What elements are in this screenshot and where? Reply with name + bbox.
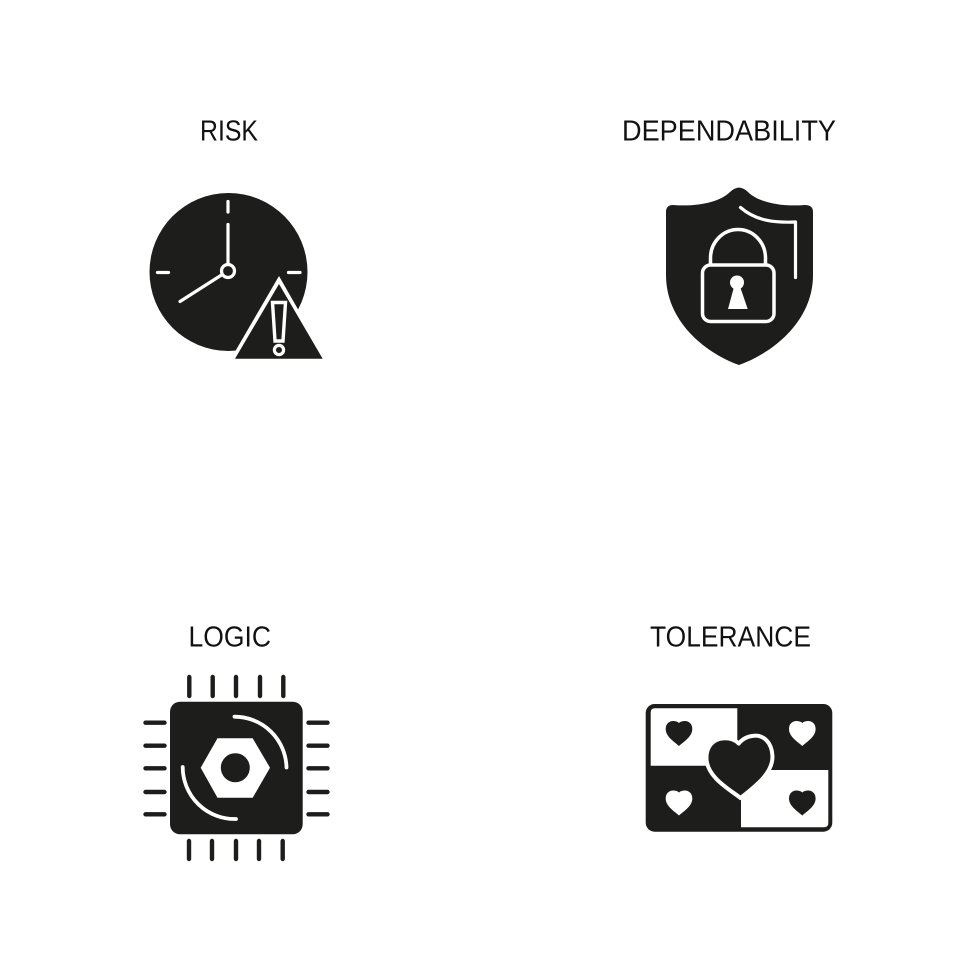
icon: processor chip with nut — [146, 677, 328, 859]
heading: logic: LOGIC — [188, 622, 271, 654]
panel: risk — [150, 116, 328, 362]
panel: tolerance — [646, 622, 832, 832]
icon: card with hearts — [646, 704, 832, 832]
heading: dependability: DEPENDABILITY — [622, 116, 836, 148]
panel: logic — [146, 622, 328, 859]
icon: clock with warning triangle — [150, 193, 328, 362]
heading: risk: RISK — [200, 116, 259, 148]
panel: dependability — [622, 116, 836, 365]
heading: tolerance: TOLERANCE — [650, 622, 811, 654]
icon: shield with padlock — [666, 188, 813, 365]
